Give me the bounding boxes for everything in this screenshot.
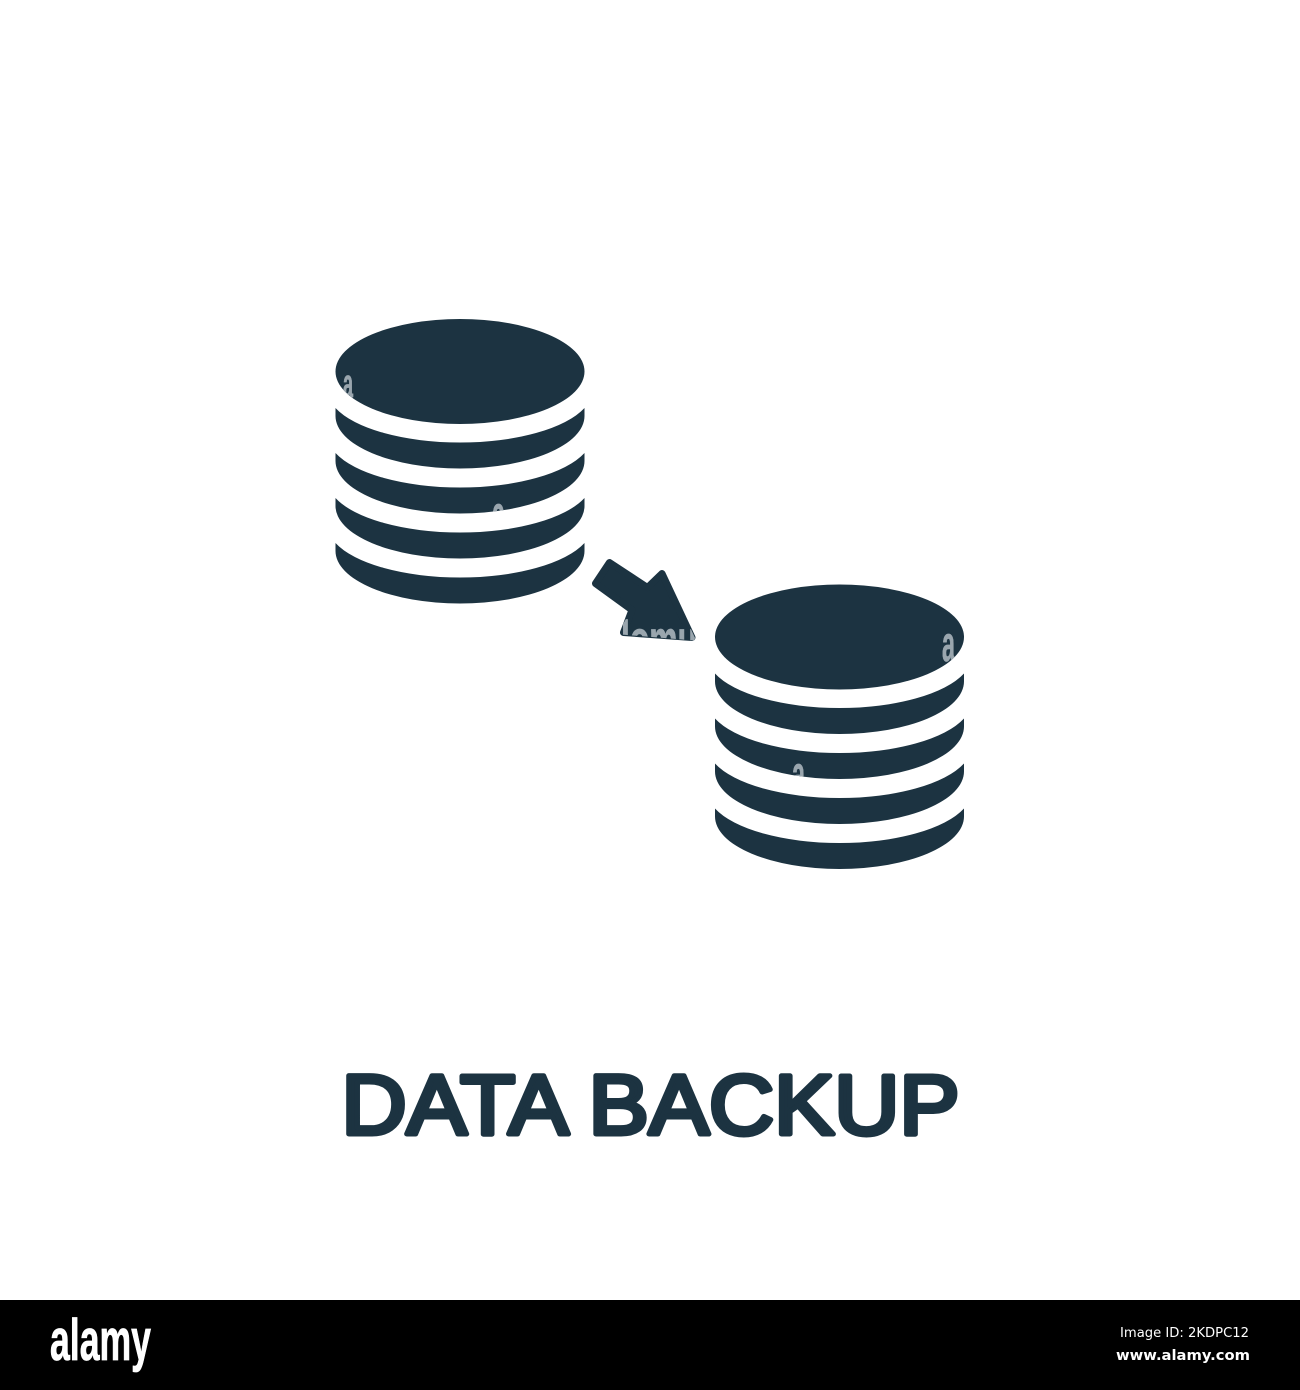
image id: Image ID: 2KDPC12 xyxy=(1120,1326,1249,1341)
icon: backup database cylinder xyxy=(715,584,964,869)
icon: arrow from source to backup: lomu xyxy=(621,611,697,667)
footer logo: alamy xyxy=(50,1308,151,1373)
icon: source database cylinder: a xyxy=(343,362,353,406)
icon: backup database cylinder: a xyxy=(792,746,806,802)
icon: backup database cylinder: a xyxy=(942,616,956,672)
title: DATA BACKUP xyxy=(342,1058,960,1152)
icon: source database cylinder: a xyxy=(492,486,506,542)
website: www.alamy.com xyxy=(1116,1348,1250,1364)
footer bar xyxy=(0,1300,1300,1390)
icon: source database cylinder xyxy=(336,319,584,604)
infographic canvas xyxy=(0,319,1300,1390)
icon: arrow from source to backup xyxy=(592,559,696,641)
